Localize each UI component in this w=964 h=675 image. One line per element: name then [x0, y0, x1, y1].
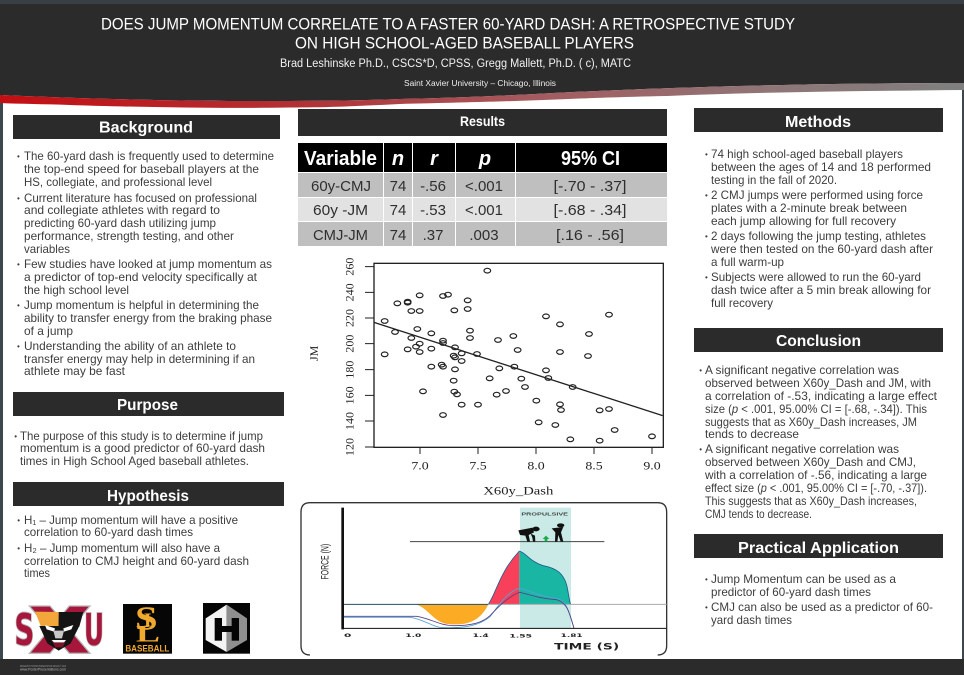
force-time chart: 1.4: [473, 633, 490, 639]
logo: hexagon H: [203, 603, 250, 654]
results table: [-.70 - .37]: [554, 178, 626, 195]
scatter plot: X60y_Dash vs JM: 220: [342, 309, 356, 327]
text block: conclusion bullets: This suggests that as X60y_Dash increases,: [705, 494, 917, 508]
text block: conclusion bullets: •: [699, 366, 702, 375]
force-time chart: FORCE (N): [320, 544, 332, 579]
text block: background bullets: and collegiate athletes with regard to: [24, 203, 220, 217]
text block: hypotheses: correlation to 60-yard dash times: [24, 525, 193, 539]
text block: methods bullets: •: [705, 273, 708, 282]
results table: 60y -JM: [313, 202, 368, 219]
text block: practical bullets: CMJ can also be used as a predictor of 60-: [711, 600, 933, 614]
footer bar: [0, 659, 964, 675]
text block: methods bullets: •: [705, 191, 708, 200]
logo: SXU cougar: U: [84, 605, 104, 656]
text block: background bullets: athlete may be fast: [24, 364, 126, 378]
icon: standing athlete: [552, 523, 564, 542]
text block: methods bullets: •: [705, 232, 708, 241]
heading: conclusion: Conclusion: [776, 333, 861, 350]
scatter plot: X60y_Dash vs JM: 9.0: [643, 459, 661, 473]
scatter plot: X60y_Dash vs JM: 260: [342, 258, 356, 276]
force-time chart: PROPULSIVE: [521, 511, 568, 516]
results table: -.56: [420, 178, 446, 195]
heading: practical application: Practical Application: [738, 540, 899, 557]
title: DOES JUMP MOMENTUM CORRELATE TO A FASTER 60-YARD DASH: A RETROSPECTIVE STUDY: [101, 14, 795, 34]
text block: background bullets: Understanding the ability of an athlete to: [24, 339, 236, 353]
text block: hypotheses: correlation to CMJ height and 60-yard dash: [24, 554, 249, 568]
force-time chart: [301, 503, 667, 655]
scatter plot: X60y_Dash vs JM: 7.0: [411, 459, 429, 473]
footer bar: RESEARCH POSTER PRESENTATION DESIGN © 2019: [20, 665, 66, 668]
logo: SXU cougar: S: [14, 605, 34, 656]
force-time chart: TIME (S): [554, 643, 619, 653]
logo: LSL baseball: BASEBALL: [125, 644, 170, 654]
panel: purpose: [13, 392, 284, 468]
text block: hypotheses: times: [24, 566, 50, 580]
text block: conclusion bullets: observed between X60y_Dash and JM, with: [705, 376, 931, 390]
scatter plot: X60y_Dash vs JM: 240: [342, 283, 356, 301]
panel: methods: [694, 108, 943, 310]
text block: conclusion bullets: observed between X60y_Dash and CMJ,: [705, 455, 916, 469]
text block: methods bullets: were then tested on the 60-yard dash after: [710, 242, 933, 256]
text block: practical bullets: yard dash times: [711, 613, 792, 627]
scatter plot: X60y_Dash vs JM: 120: [342, 438, 356, 456]
affiliation: Saint Xavier University – Chicago, Illinois: [404, 79, 556, 88]
text block: conclusion bullets: •: [699, 445, 702, 454]
text block: background bullets: of a jump: [24, 324, 73, 338]
force-time chart: 1.81: [561, 633, 583, 639]
text block: practical bullets: •: [705, 603, 708, 612]
scatter plot: X60y_Dash vs JM: 8.5: [585, 459, 603, 473]
text block: methods bullets: Subjects were allowed to run the 60-yard: [711, 270, 921, 284]
text block: methods bullets: 74 high school-aged baseball players: [711, 147, 903, 161]
results table: .003: [469, 227, 499, 244]
authors: Brad Leshinske Ph.D., CSCS*D, CPSS, Gregg Mallett, Ph.D. ( c), MATC: [280, 58, 631, 70]
results table: Variable: [304, 148, 377, 170]
scatter plot: X60y_Dash vs JM: 160: [342, 386, 356, 404]
text block: purpose: times in High School Aged baseball athletes.: [20, 454, 249, 468]
icon: green arrow: [543, 536, 549, 542]
text block: methods bullets: 2 CMJ jumps were performed using force: [711, 188, 923, 202]
text block: purpose: The purpose of this study is to determine if jump: [20, 429, 263, 443]
results table: [.16 - .56]: [556, 227, 624, 244]
text block: background bullets: Few studies have looked at jump momentum as: [24, 257, 272, 271]
text block: conclusion bullets: tends to decrease: [705, 427, 799, 441]
results table: CMJ-JM: [313, 227, 368, 244]
text block: methods bullets: each jump allowing for full recovery: [711, 214, 896, 228]
text block: purpose: [14, 429, 265, 468]
logos row: [14, 600, 250, 656]
scatter plot: X60y_Dash vs JM: 8.0: [527, 459, 545, 473]
text block: background bullets: Current literature has focused on professional: [24, 191, 257, 205]
text block: conclusion bullets: A significant negative correlation was: [705, 442, 899, 456]
text block: hypotheses: [17, 513, 249, 580]
results table: 74: [390, 202, 406, 219]
title: ON HIGH SCHOOL-AGED BASEBALL PLAYERS: [295, 34, 634, 52]
force-time chart: 1.55: [509, 633, 532, 639]
text block: methods bullets: •: [705, 150, 708, 159]
heading: hypothesis: Hypothesis: [107, 488, 189, 505]
text block: practical bullets: predictor of 60-yard dash times: [711, 585, 871, 599]
heading: purpose: Purpose: [117, 397, 178, 414]
text block: background bullets: [17, 149, 274, 378]
title: [101, 14, 795, 52]
text block: purpose: •: [14, 432, 17, 441]
panel: practical application: [694, 534, 943, 627]
text block: conclusion bullets: CMJ tends to decrease.: [705, 507, 812, 521]
icon: crouched athlete: [518, 527, 540, 542]
text block: hypotheses: H₂ – Jump momentum will also have a: [24, 541, 220, 555]
text block: background bullets: •: [17, 342, 20, 351]
text block: methods bullets: dash twice after a 5 min break allowing for: [711, 283, 931, 297]
text block: practical bullets: [705, 572, 933, 627]
text block: methods bullets: between the ages of 14 and 18 performed: [711, 160, 931, 174]
scatter plot: X60y_Dash vs JM: 140: [342, 412, 356, 430]
results table: 60y-CMJ: [311, 178, 371, 195]
text block: conclusion bullets: suggests that as X60y_Dash increases, JM: [705, 415, 917, 429]
text block: background bullets: predicting 60-yard dash utilizing jump: [24, 216, 216, 230]
text block: background bullets: HS, collegiate, and professional level: [24, 175, 212, 189]
force-time chart: 1.0: [405, 633, 423, 639]
logo: LSL baseball: L: [136, 621, 160, 647]
text block: conclusion bullets: size (p < .001, 95.00% CI = [-.68, -.34]). This: [705, 402, 927, 416]
results table: 74: [390, 227, 406, 244]
text block: background bullets: variables: [24, 242, 70, 256]
text block: practical bullets: •: [705, 575, 708, 584]
results table: <.001: [465, 178, 503, 195]
scatter plot: X60y_Dash vs JM: 200: [342, 335, 356, 353]
text block: background bullets: ability to transfer energy from the braking phase: [24, 311, 272, 325]
text block: background bullets: •: [17, 301, 20, 310]
heading: conclusion: [694, 328, 943, 352]
text block: background bullets: Jump momentum is helpful in determining the: [24, 298, 259, 312]
text block: background bullets: performance, strength testing, and other: [24, 229, 234, 243]
panel: hypothesis: [13, 482, 284, 580]
heading: purpose: [13, 392, 284, 416]
text block: conclusion bullets: effect size (p < .001, 95.00% CI = [-.70, -.37]).: [705, 481, 927, 495]
text block: conclusion bullets: [699, 363, 938, 521]
text block: methods bullets: 2 days following the jump testing, athletes: [711, 229, 926, 243]
scatter plot: X60y_Dash vs JM: 180: [342, 361, 356, 379]
text block: practical bullets: Jump Momentum can be used as a: [711, 572, 896, 586]
text block: background bullets: the high school level: [24, 283, 129, 297]
text block: conclusion bullets: A significant negative correlation was: [705, 363, 899, 377]
text block: methods bullets: a full warm-up: [711, 255, 784, 269]
text block: background bullets: a predictor of top-end velocity specifically at: [24, 270, 258, 284]
text block: hypotheses: H₁ – Jump momentum will have a positive: [24, 513, 238, 527]
scatter plot: X60y_Dash vs JM: X60y_Dash: [483, 483, 553, 497]
scatter plot: X60y_Dash vs JM: [307, 258, 663, 497]
text block: background bullets: •: [17, 152, 20, 161]
scatter plot: X60y_Dash vs JM: JM: [307, 345, 321, 361]
text block: background bullets: •: [17, 194, 20, 203]
heading: background: Background: [99, 120, 193, 136]
results table: 74: [390, 178, 406, 195]
text block: background bullets: The 60-yard dash is frequently used to determine: [24, 149, 274, 163]
logo: LSL baseball: [123, 600, 172, 654]
results table: r: [430, 148, 439, 170]
text block: background bullets: transfer energy may help in determining if an: [24, 352, 255, 366]
text block: background bullets: •: [17, 260, 20, 269]
heading: methods: Methods: [785, 114, 851, 131]
text block: background bullets: the top-end speed for baseball players at the: [24, 162, 259, 176]
heading: hypothesis: [13, 482, 284, 506]
header banner: [0, 0, 964, 108]
footer bar: www.PosterPresentations.com: [20, 668, 66, 672]
text block: hypotheses: •: [17, 544, 20, 553]
text block: methods bullets: [705, 147, 933, 310]
panel: results: [298, 109, 667, 655]
force-time chart: 0: [344, 633, 353, 639]
heading: results: [298, 109, 667, 136]
results table: n: [392, 148, 404, 170]
text block: hypotheses: •: [17, 516, 20, 525]
logo: LSL baseball: I: [144, 610, 152, 632]
results table: 95% CI: [561, 148, 620, 170]
text block: methods bullets: plates with a 2-minute break between: [711, 201, 907, 215]
heading: practical application: [694, 534, 943, 558]
heading: background: [13, 115, 280, 139]
logo: LSL baseball: S: [135, 600, 158, 637]
text block: purpose: momentum is a good predictor of 60-yard dash: [20, 441, 265, 455]
scatter plot: X60y_Dash vs JM: 7.5: [469, 459, 487, 473]
results table: p: [478, 148, 491, 170]
text block: methods bullets: testing in the fall of 2020.: [711, 173, 837, 187]
panel: background: [13, 115, 280, 378]
text block: conclusion bullets: with a correlation of -.56, indicating a large: [704, 468, 927, 482]
results table: <.001: [465, 202, 503, 219]
text block: conclusion bullets: a correlation of -.53, indicating a large effect: [705, 389, 938, 403]
results table: -.53: [420, 202, 446, 219]
text block: methods bullets: full recovery: [711, 296, 773, 310]
results table: .37: [423, 227, 443, 244]
heading: methods: [694, 108, 943, 132]
results table: [298, 143, 667, 246]
logo: SXU cougar: [14, 605, 104, 656]
heading: results: Results: [460, 113, 505, 129]
panel: conclusion: [694, 328, 943, 521]
results table: [-.68 - .34]: [554, 202, 626, 219]
